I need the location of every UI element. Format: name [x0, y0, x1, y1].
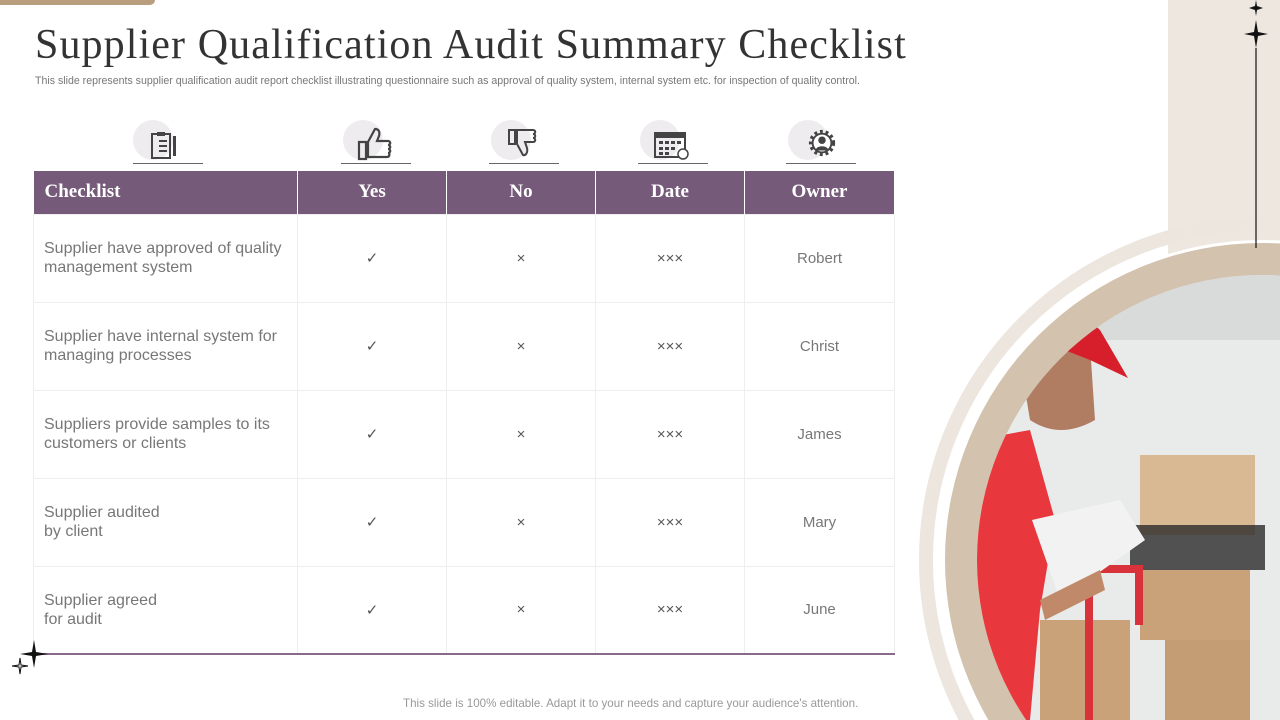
checklist table	[33, 171, 895, 655]
checklist table: ×	[517, 250, 525, 266]
checklist table: No	[509, 181, 533, 202]
icons row	[133, 120, 856, 164]
title: Supplier Qualification Audit Summary Checklist	[35, 22, 907, 68]
icon: gear person	[786, 120, 856, 164]
checklist table: ×××	[657, 250, 683, 266]
checklist table: Date	[651, 181, 689, 202]
photo: worker with boxes	[970, 260, 1280, 720]
checklist table: Supplier have internal system for managing processes	[44, 328, 277, 364]
checklist table: ×××	[657, 426, 683, 442]
checklist table: Checklist	[44, 181, 120, 202]
icon: sparkles bottom-left	[12, 640, 48, 674]
checklist table: for audit	[44, 611, 102, 628]
checklist table: Owner	[792, 181, 847, 202]
checklist table: ✓	[366, 602, 378, 619]
checklist table: Robert	[797, 250, 842, 266]
checklist table: ×××	[657, 601, 683, 618]
checklist table: by client	[44, 523, 103, 540]
checklist table: ✓	[366, 514, 378, 531]
subtitle: This slide represents supplier qualification audit report checklist illustrating questionnaire such as approval of quality system, internal system etc. for inspection of quality control.	[35, 75, 860, 87]
checklist table: ✓	[366, 338, 378, 355]
checklist table: ×	[517, 514, 525, 530]
icon: sparkles top-right with line	[1244, 0, 1268, 248]
checklist table: ✓	[366, 426, 378, 443]
footer note: This slide is 100% editable. Adapt it to your needs and capture your audience's attention.	[403, 697, 858, 710]
checklist table: June	[803, 601, 836, 618]
checklist table: ✓	[366, 250, 378, 267]
checklist table: Suppliers provide samples to its customers or clients	[44, 416, 270, 452]
checklist table: James	[797, 426, 842, 442]
icon: thumbs up	[341, 120, 411, 164]
checklist table: ×	[517, 601, 525, 618]
checklist table: Supplier have approved of quality management system	[44, 240, 282, 276]
icon: calendar	[638, 120, 708, 164]
icon: thumbs down	[489, 120, 559, 164]
checklist table: Mary	[803, 514, 836, 530]
checklist table: Yes	[358, 181, 386, 202]
checklist table: ×	[517, 426, 525, 442]
checklist table: ×××	[657, 338, 683, 354]
right decorative panel with photo	[919, 0, 1280, 720]
checklist table: ×××	[657, 514, 683, 530]
checklist table: Supplier agreed	[44, 592, 157, 609]
top-left decorative tab	[0, 0, 155, 5]
checklist table: Christ	[800, 338, 839, 354]
icon: clipboard	[133, 120, 203, 164]
checklist table: Supplier audited	[44, 504, 160, 521]
checklist table: ×	[517, 338, 525, 354]
